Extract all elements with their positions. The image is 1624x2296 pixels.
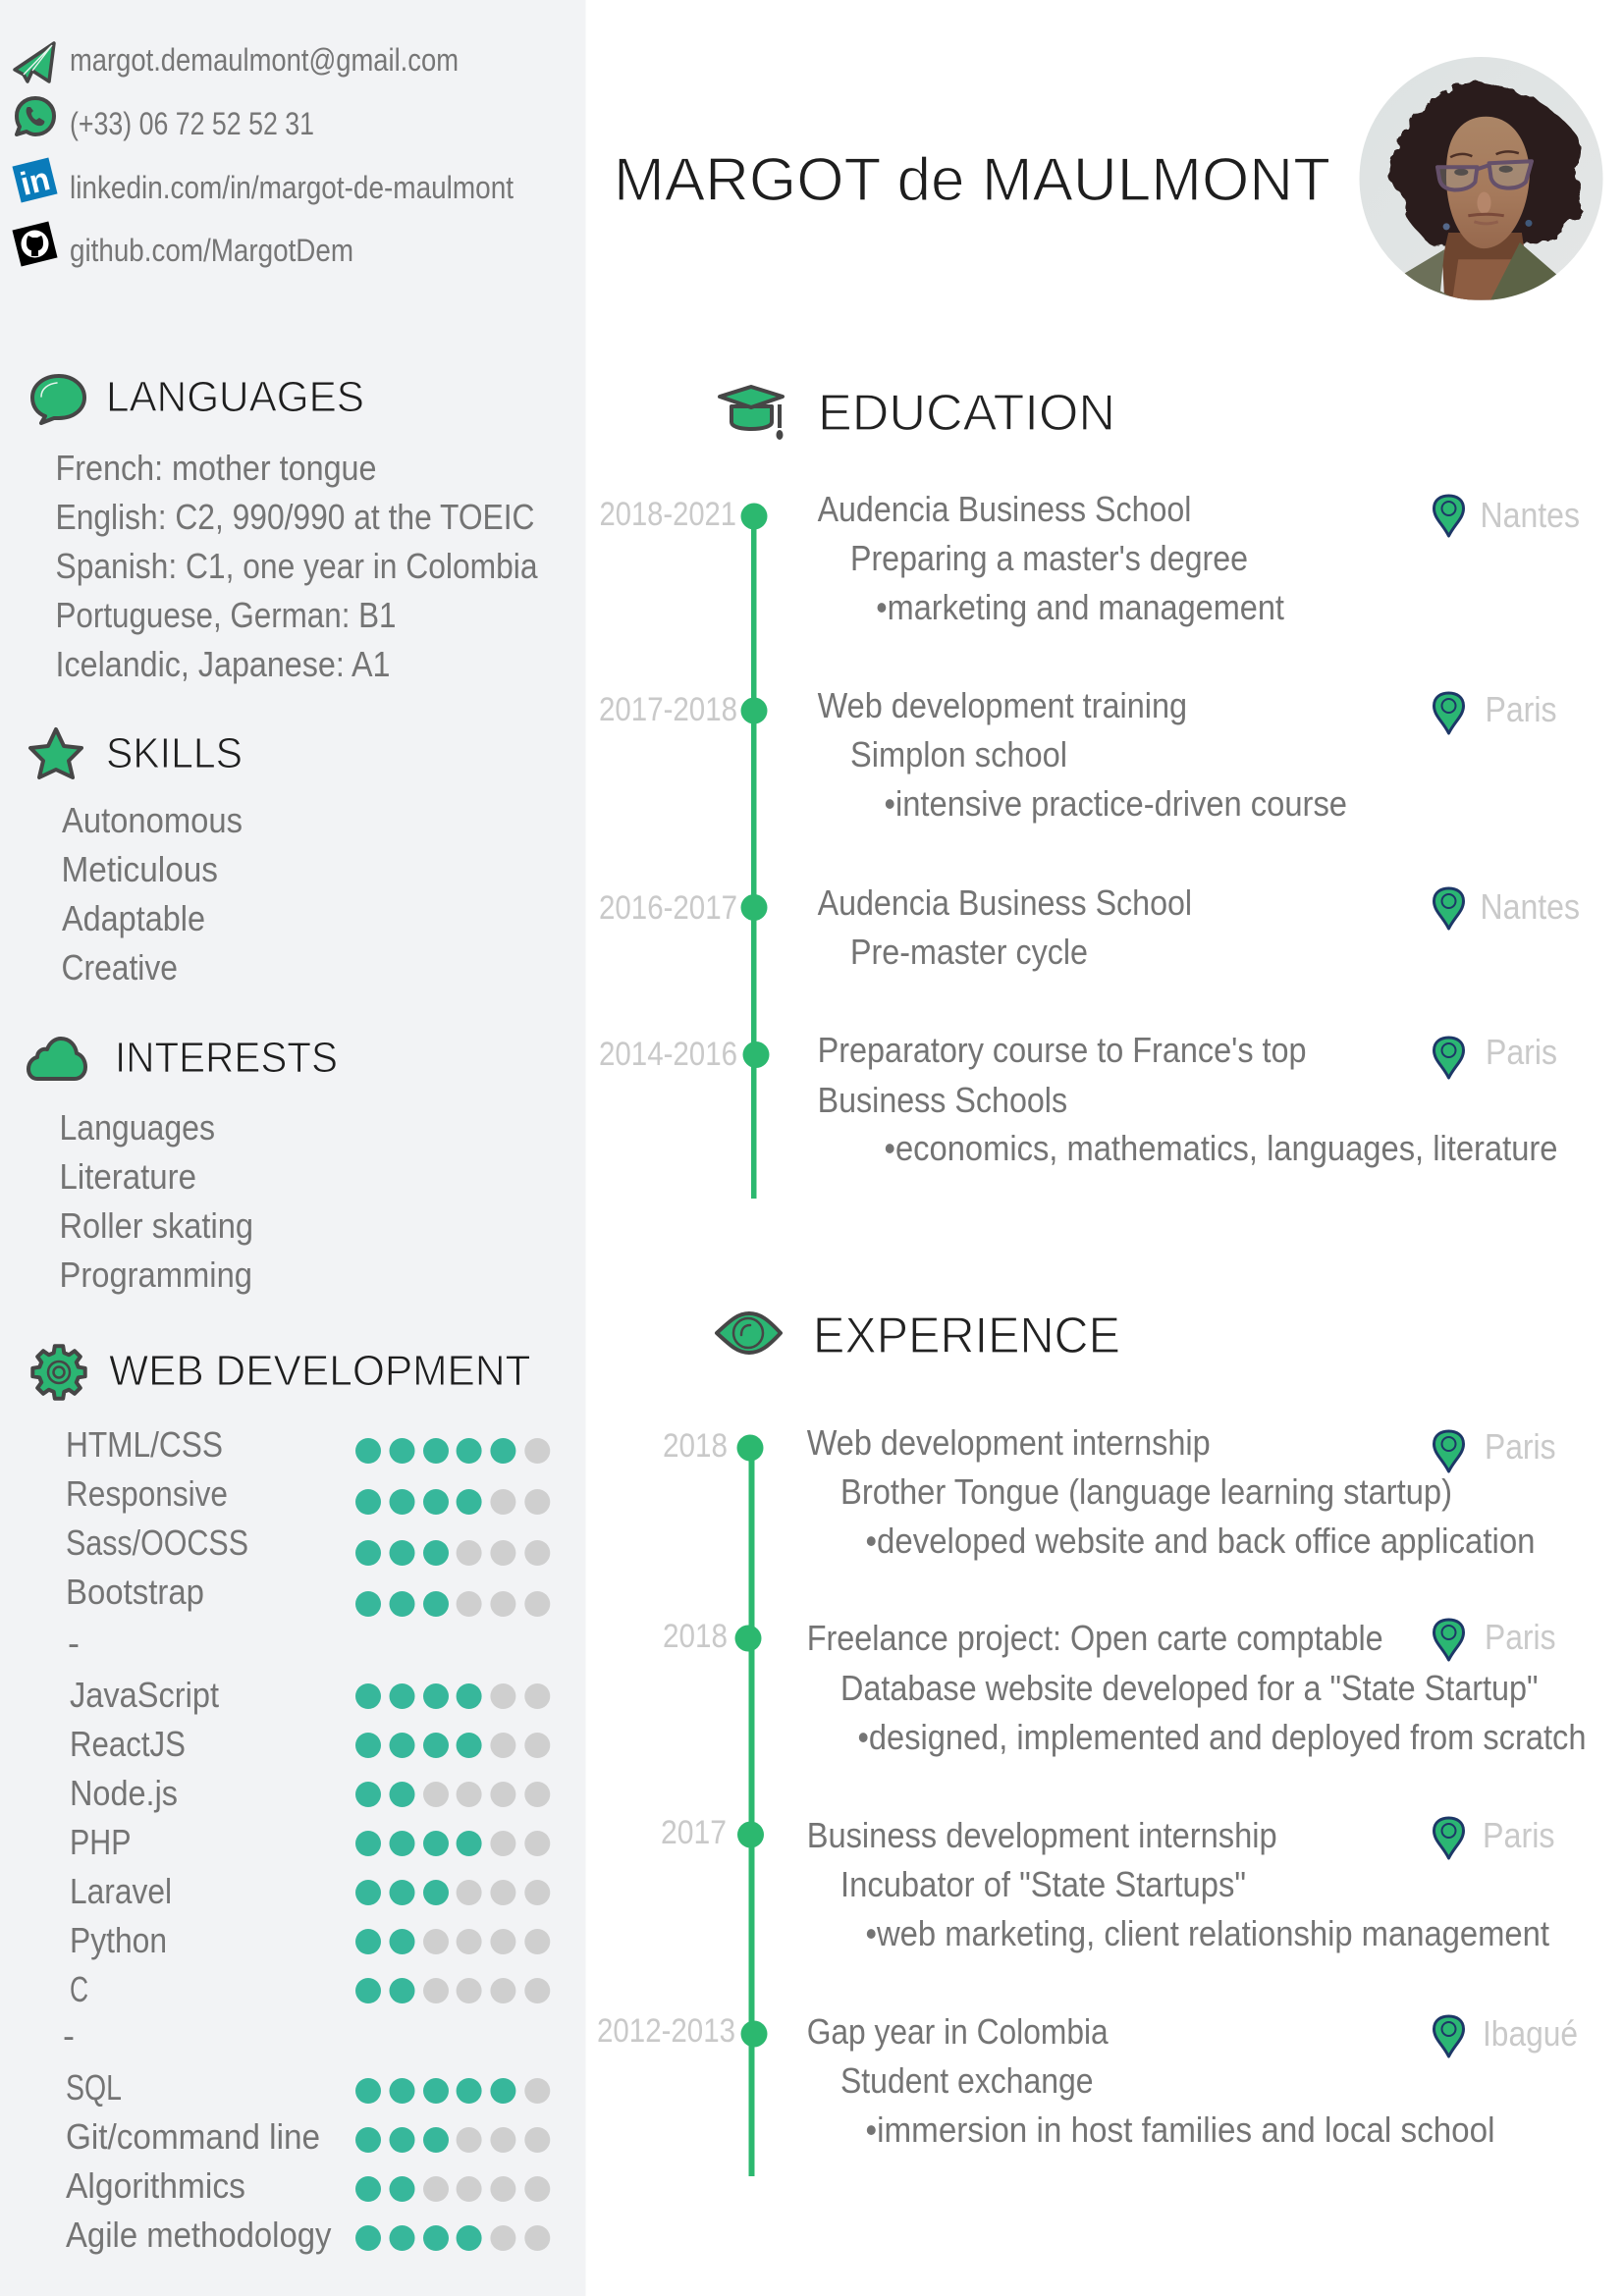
language list: Icelandic, Japanese: A1 [55,644,391,684]
entry: freelance project: Database website developed for a "State Startup" [840,1668,1538,1708]
skill row: Agile methodology [66,2215,550,2255]
section: languages [32,373,538,684]
skill row: Bootstrap [66,1572,550,1617]
heading: languages: LANGUAGES [106,373,364,421]
entry: web development internship: Paris [1485,1426,1555,1467]
icon: paper plane [15,43,54,81]
entry: business development internship: 2017 [661,1814,727,1851]
section: web development [32,1346,550,2255]
language list: Spanish: C1, one year in Colombia [55,546,538,586]
entry: gap year [597,2011,1578,2150]
entry: Audencia master: Preparing a master's degree [850,538,1248,578]
entry: business development internship [661,1814,1555,1953]
entry: pre-master [599,882,1580,972]
entry: pre-master: Nantes [1481,886,1580,927]
entry: Audencia master [599,489,1580,627]
skill row: Algorithmics [66,2165,550,2206]
entry: gap year: •immersion in host families and local school [866,2109,1494,2150]
separator dash: - [63,2015,75,2056]
entry: preparatory course: Business Schools [818,1080,1067,1120]
email: margot.demaulmont@gmail.com [70,42,459,78]
skills list: Adaptable [62,898,205,938]
title: MARGOT de MAULMONT [614,146,1330,214]
skills list [61,800,243,988]
linkedin url: linkedin.com/in/margot-de-maulmont [70,170,514,205]
skill row: C [70,1969,550,2009]
heading: skills: SKILLS [106,729,243,777]
entry: freelance project: Paris [1485,1617,1555,1657]
entry: freelance project [663,1617,1587,1757]
interests list: Roller skating [59,1205,253,1246]
interests list [59,1107,253,1295]
skill row: Sass/OOCSS: Sass/OOCSS [66,1522,248,1563]
skill row: C: C [70,1969,88,2009]
icon: linkedin: in [17,160,53,202]
heading: education: EDUCATION [818,385,1115,442]
entry: web development training: Simplon school [850,734,1067,774]
skill row: PHP [70,1822,550,1862]
skill row: Python [70,1920,550,1960]
entry: Audencia master: •marketing and management [876,587,1284,627]
skill row: Bootstrap: Bootstrap [66,1572,204,1612]
github url: github.com/MargotDem [70,233,353,268]
interests list: Literature [59,1156,196,1197]
interests list: Programming [59,1255,252,1295]
skill row: ReactJS: ReactJS [70,1724,186,1764]
entry: pre-master: Pre-master cycle [850,932,1088,972]
section: interests [28,1034,338,1295]
language list: French: mother tongue [55,448,377,488]
entry: pre-master: 2016-2017 [599,889,737,927]
section: skills [30,729,243,988]
skill row: Python: Python [70,1920,167,1960]
section: education [599,385,1580,1199]
entry: gap year: 2012-2013 [597,2012,735,2050]
panel: left sidebar [0,0,585,2296]
entry: Audencia master: Nantes [1481,495,1580,535]
heading: web development: WEB DEVELOPMENT [109,1347,530,1395]
entry: preparatory course: •economics, mathematics, languages, literature [884,1128,1557,1168]
entry: web development training: •intensive practice-driven course [884,783,1347,824]
skill row: Git/command line: Git/command line [66,2116,320,2157]
icon: eye [717,1313,781,1353]
icon: whatsapp [17,98,54,134]
skill row: Responsive: Responsive [66,1473,228,1514]
entry: web development internship [663,1422,1555,1561]
language list: Portuguese, German: B1 [55,595,397,635]
timeline: education [740,503,770,1199]
icon: cloud [28,1039,85,1079]
icon: speech bubble [32,376,84,423]
entry: web development training [599,685,1557,824]
entry: gap year: Gap year in Colombia [807,2011,1110,2052]
phone: (+33) 06 72 52 52 31 [70,106,314,141]
entry: Audencia master: 2018-2021 [599,496,736,533]
heading: experience: EXPERIENCE [813,1308,1120,1364]
skill row: SQL [66,2067,550,2108]
contact block [12,42,514,268]
skills list: Autonomous [62,800,243,840]
entry: preparatory course: 2014-2016 [599,1036,737,1073]
skill row: Agile methodology: Agile methodology [66,2215,332,2255]
entry: web development training: 2017-2018 [599,691,737,728]
entry: preparatory course [599,1030,1557,1168]
skills list: Meticulous [61,849,218,889]
entry: Audencia master: Audencia Business School [818,489,1191,529]
entry: pre-master: Audencia Business School [818,882,1192,923]
skill row: Algorithmics: Algorithmics [66,2165,245,2206]
skill row: HTML/CSS: HTML/CSS [66,1424,223,1465]
skill row: PHP: PHP [70,1822,132,1862]
entry: web development internship: Web development internship [807,1422,1211,1463]
entry: web development internship: •developed website and back office application [866,1521,1536,1561]
section: experience [597,1308,1587,2176]
heading: interests: INTERESTS [115,1034,338,1082]
skill row: Laravel: Laravel [70,1871,172,1911]
timeline: experience [734,1435,768,2176]
language list: English: C2, 990/990 at the TOEIC [55,497,534,537]
entry: gap year: Student exchange [840,2060,1094,2101]
entry: gap year: Ibagué [1483,2013,1578,2054]
skill row: SQL: SQL [66,2067,122,2108]
portrait photo [1355,54,1608,305]
icon: star [30,729,81,777]
entry: business development internship: Paris [1483,1815,1555,1855]
skill row: Node.js: Node.js [70,1773,178,1813]
skill row: Laravel [70,1871,550,1911]
entry: business development internship: Business development internship [807,1815,1277,1855]
entry: web development internship: 2018 [663,1427,728,1465]
skill row: HTML/CSS [66,1424,550,1465]
skill row: Node.js [70,1773,550,1813]
skill row: JavaScript: JavaScript [70,1675,219,1715]
separator dash: - [68,1623,80,1663]
skill row: JavaScript [70,1675,550,1715]
skill row: Sass/OOCSS [66,1522,550,1566]
interests list: Languages [59,1107,215,1148]
entry: business development internship: •web marketing, client relationship management [866,1913,1549,1953]
icon: github [12,221,58,267]
icon: gear [32,1346,85,1399]
skills list: Creative [61,947,178,988]
skill row: ReactJS [70,1724,550,1764]
entry: preparatory course: Preparatory course to France's top [818,1030,1307,1070]
entry: freelance project: Freelance project: Open carte comptable [807,1618,1383,1658]
entry: freelance project: 2018 [663,1618,728,1655]
entry: business development internship: Incubator of "State Startups" [840,1864,1246,1904]
entry: web development training: Paris [1485,689,1557,729]
entry: preparatory course: Paris [1486,1032,1557,1072]
entry: web development training: Web development training [818,685,1187,725]
language list [55,448,538,684]
entry: web development internship: Brother Tongue (language learning startup) [840,1471,1452,1512]
skill row: Git/command line [66,2116,550,2157]
skill row: Responsive [66,1473,550,1515]
icon: graduation cap [720,387,784,440]
